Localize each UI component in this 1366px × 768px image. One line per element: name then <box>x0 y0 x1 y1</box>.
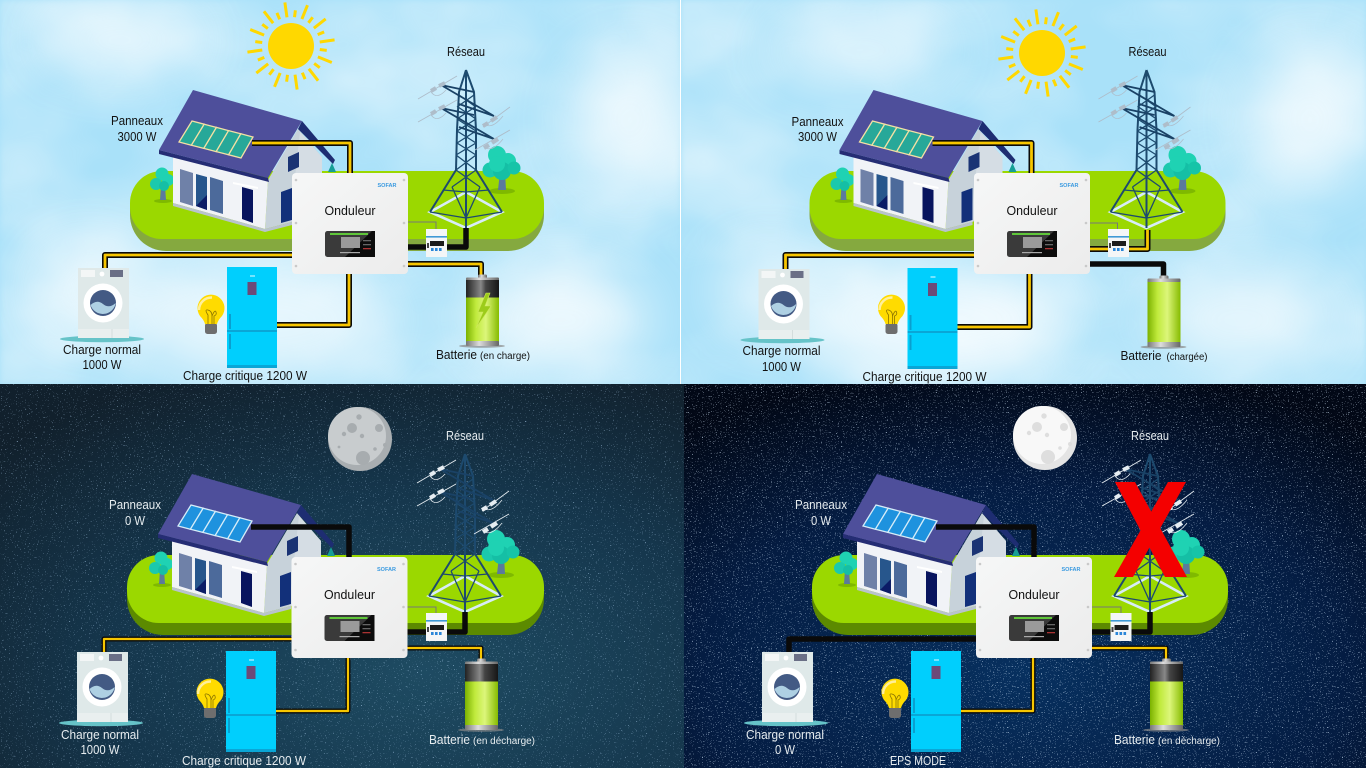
bulb <box>197 295 224 334</box>
meter <box>426 613 447 641</box>
labels: Charge normal <box>61 727 139 742</box>
tree right <box>482 530 520 578</box>
meter <box>426 229 447 257</box>
labels: 1000 W <box>80 742 120 757</box>
labels: 0 W <box>125 513 146 528</box>
labels: Batterie <box>1120 348 1162 363</box>
wires <box>104 527 481 711</box>
tree small <box>327 547 335 556</box>
labels: Panneaux <box>795 497 847 512</box>
wires <box>786 143 1164 327</box>
bulb <box>878 295 905 334</box>
inverter: Onduleur <box>1008 587 1060 602</box>
tree left <box>830 168 854 203</box>
bulb <box>196 679 224 718</box>
tree right <box>1163 146 1201 194</box>
labels <box>746 428 1220 768</box>
island <box>130 171 544 251</box>
labels: Charge critique 1200 W <box>862 369 987 384</box>
battery full <box>1140 276 1186 349</box>
background: ciel étoilé <box>684 384 1366 768</box>
inverter: Onduleur <box>324 203 376 218</box>
washing machine <box>60 268 144 342</box>
fridge <box>911 651 961 752</box>
tree left <box>150 168 174 203</box>
labels: Réseau <box>447 44 485 59</box>
inverter: SOFAR <box>1060 183 1078 189</box>
pylon <box>1102 454 1194 612</box>
solar panel <box>178 505 252 542</box>
labels: Batterie <box>436 347 477 362</box>
background: ciel <box>681 0 1366 384</box>
panel: jour, batterie en charge <box>0 0 690 384</box>
tree small <box>328 163 336 172</box>
fridge <box>908 268 958 369</box>
labels: (en décharge) <box>473 736 535 747</box>
pylon <box>418 70 510 228</box>
island <box>127 555 544 635</box>
labels: Batterie <box>1114 732 1155 747</box>
bulb <box>882 679 908 718</box>
labels: Réseau <box>446 428 484 443</box>
background: ciel de nuit <box>0 384 684 768</box>
tree small <box>1008 163 1016 172</box>
solar panel <box>863 505 937 542</box>
tree left <box>149 552 173 587</box>
panel: nuit, mode EPS <box>684 384 1366 768</box>
island <box>812 555 1228 635</box>
icon: croix rouge réseau coupé <box>1114 482 1187 577</box>
island <box>810 171 1226 251</box>
washing machine <box>744 652 828 726</box>
panel: nuit, batterie en décharge <box>0 384 684 768</box>
washing machine <box>740 269 824 343</box>
icon: lune blanche <box>1013 406 1077 470</box>
wires <box>789 527 1166 711</box>
inverter: SOFAR <box>378 183 396 189</box>
labels: Réseau <box>1128 44 1166 59</box>
fridge <box>226 651 276 752</box>
panel: jour, batterie chargée <box>681 0 1366 384</box>
house <box>158 474 334 616</box>
inverter <box>292 557 408 658</box>
labels: Charge normal <box>63 342 141 357</box>
labels: Charge normal <box>746 727 824 742</box>
solar panel <box>860 121 934 158</box>
labels: Panneaux <box>109 497 161 512</box>
scene <box>59 428 544 768</box>
scene <box>740 44 1226 384</box>
battery charging <box>459 274 505 348</box>
inverter <box>974 173 1090 274</box>
labels: Panneaux <box>792 114 844 129</box>
house <box>159 90 335 232</box>
meter <box>1108 229 1129 257</box>
inverter <box>976 557 1092 658</box>
labels: (en charge) <box>480 351 530 362</box>
labels <box>61 428 535 768</box>
icon: soleil <box>998 9 1086 97</box>
tree right <box>1166 530 1204 578</box>
labels: Charge critique 1200 W <box>183 368 308 383</box>
inverter: Onduleur <box>1006 203 1058 218</box>
labels: 1000 W <box>82 357 122 372</box>
labels: (chargée) <box>1166 352 1208 363</box>
pylon <box>417 454 509 612</box>
background: ciel <box>0 0 690 384</box>
labels: Réseau <box>1131 428 1169 443</box>
inverter <box>292 173 408 274</box>
icon: lune grise <box>328 407 392 471</box>
battery <box>458 658 504 732</box>
washing machine <box>59 652 143 726</box>
pylon <box>1098 70 1190 228</box>
labels: Charge normal <box>742 343 821 358</box>
labels: Batterie <box>429 732 470 747</box>
inverter: SOFAR <box>1062 567 1080 573</box>
solar panel <box>179 121 253 158</box>
labels: 3000 W <box>118 129 157 144</box>
house <box>840 90 1016 232</box>
inverter: SOFAR <box>377 567 396 573</box>
tree small <box>1012 547 1020 556</box>
house <box>843 474 1019 616</box>
meter <box>1110 613 1132 641</box>
labels: Charge critique 1200 W <box>182 753 307 768</box>
labels: EPS MODE <box>890 753 946 768</box>
wires <box>105 143 481 325</box>
labels: 3000 W <box>798 129 838 144</box>
labels <box>63 44 530 383</box>
battery <box>1143 658 1189 732</box>
tree right <box>482 146 520 194</box>
labels: 1000 W <box>762 359 802 374</box>
labels <box>742 44 1208 384</box>
icon: soleil <box>247 2 335 90</box>
labels: 0 W <box>775 742 796 757</box>
tree left <box>834 552 858 587</box>
fridge <box>227 267 277 368</box>
labels: (en décharge) <box>1158 736 1220 747</box>
scene <box>744 428 1228 768</box>
labels: 0 W <box>811 513 832 528</box>
labels: Panneaux <box>111 113 163 128</box>
inverter: Onduleur <box>324 587 376 602</box>
